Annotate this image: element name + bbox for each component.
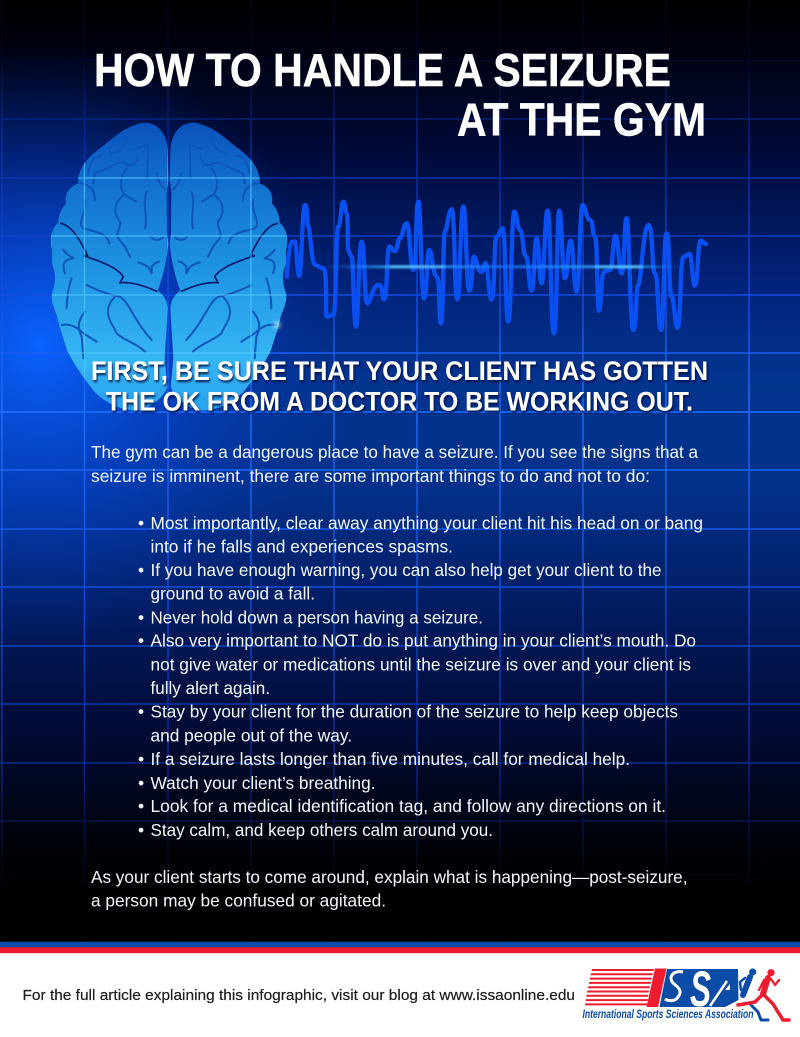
blue runner	[740, 968, 768, 1020]
intro paragraph: The gym can be a dangerous place to have a seizure. If you see the signs that a	[91, 442, 698, 462]
footer stripes	[0, 942, 800, 953]
title: HOW TO HANDLE A SEIZURE	[94, 44, 671, 96]
bullet list: •	[138, 631, 144, 651]
footer text: For the full article explaining this infographic, visit our blog at www.issaonline.edu	[22, 987, 575, 1004]
right hemisphere	[170, 123, 287, 410]
subheading	[91, 356, 708, 416]
title: AT THE GYM	[457, 94, 706, 146]
EEG waveform	[287, 202, 706, 333]
bullet list: Also very important to NOT do is put anything in your client’s mouth. Do	[150, 631, 696, 651]
bullet list: •	[138, 702, 144, 722]
logo letters: S	[690, 961, 711, 1017]
title	[94, 44, 706, 146]
bullet list: ground to avoid a fall.	[150, 583, 315, 603]
subheading: FIRST, BE SURE THAT YOUR CLIENT HAS GOTTEN	[91, 356, 708, 386]
red runner	[738, 969, 789, 1020]
intro paragraph: seizure is imminent, there are some important things to do and not to do:	[91, 466, 650, 486]
bullet list: and people out of the way.	[150, 726, 352, 746]
bullet list: Stay calm, and keep others calm around you.	[150, 820, 493, 840]
closing paragraph: As your client starts to come around, explain what is happening—post-seizure,	[91, 867, 688, 887]
bullet list: •	[138, 796, 144, 816]
bullet list: Look for a medical identification tag, and follow any directions on it.	[150, 796, 666, 816]
bullet list: Never hold down a person having a seizure.	[150, 607, 483, 627]
bullet list: not give water or medications until the seizure is over and your client is	[150, 655, 691, 675]
bullet list: Watch your client’s breathing.	[150, 773, 376, 793]
bullet list	[138, 513, 703, 840]
intro paragraph	[91, 442, 698, 486]
ISSA logo	[582, 961, 789, 1021]
bullet list: •	[138, 773, 144, 793]
footer panel	[0, 942, 800, 1037]
brain illustration	[50, 122, 288, 410]
bullet list: fully alert again.	[150, 678, 270, 698]
bullet list: •	[138, 749, 144, 769]
logo letters	[660, 961, 738, 1017]
subheading: THE OK FROM A DOCTOR TO BE WORKING OUT.	[106, 386, 693, 416]
bullet list: Stay by your client for the duration of the seizure to help keep objects	[150, 702, 678, 722]
bullet list: into if he falls and experiences spasms.	[150, 537, 453, 557]
left hemisphere	[51, 123, 168, 410]
bullet list: •	[138, 607, 144, 627]
bullet list: •	[138, 560, 144, 580]
closing paragraph: a person may be confused or agitated.	[91, 891, 386, 911]
logo stripes	[585, 968, 666, 1007]
bullet list: If you have enough warning, you can also help get your client to the	[150, 560, 662, 580]
bullet list: •	[138, 513, 144, 533]
bullet list: •	[138, 820, 144, 840]
closing paragraph	[91, 867, 688, 911]
bullet list: If a seizure lasts longer than five minutes, call for medical help.	[150, 749, 630, 769]
bullet list: Most importantly, clear away anything your client hit his head on or bang	[150, 513, 703, 533]
